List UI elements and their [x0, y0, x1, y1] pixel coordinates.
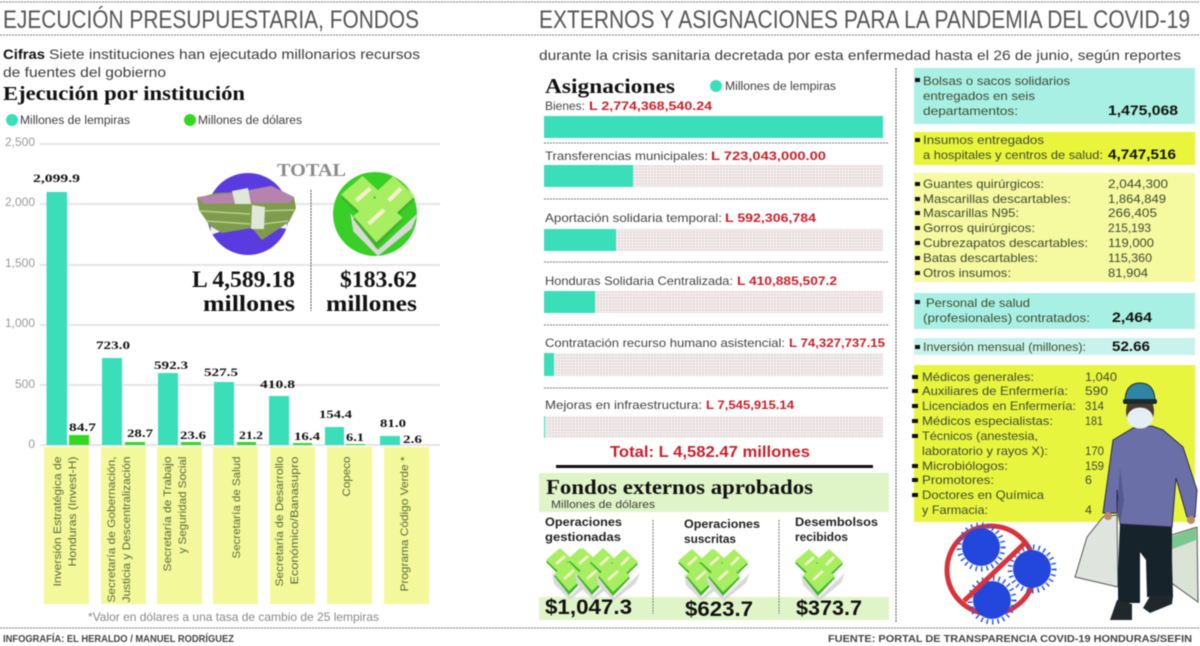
panel: profesionales: Médicos generales:: [922, 370, 1034, 384]
row labels and amounts: Transferencias municipales:: [545, 149, 708, 163]
column: operaciones gestionadas: Operaciones: [545, 517, 622, 529]
column: operaciones suscritas: Operaciones: [684, 519, 760, 531]
total callout: $183.62: [340, 267, 417, 292]
shirt: [1103, 426, 1197, 527]
category labels: Justicia y Descentralización: [121, 456, 133, 602]
panel: lista de insumos: Cubrezapatos descartables:: [923, 236, 1088, 250]
intro text right: durante la crisis sanitaria decretada por esta enfermedad hasta el 26 de junio, según reportes: [539, 47, 1181, 63]
panel: lista de insumos: 119,000: [1108, 236, 1154, 250]
panel: lista de insumos: Otros insumos:: [923, 266, 1011, 280]
category labels: [44, 447, 429, 604]
bar chart: ejecución por institución: 84.7: [69, 420, 96, 434]
row labels and amounts: Aportación solidaria temporal:: [545, 211, 722, 225]
category labels: Copeco: [341, 456, 353, 496]
panel: personal de salud: 2,464: [1112, 309, 1152, 325]
panel: lista de insumos: 81,904: [1108, 266, 1148, 280]
total asignaciones: Total: L 4,582.47 millones: [610, 444, 810, 461]
panel: profesionales: 6: [1085, 473, 1092, 487]
row labels and amounts: L 7,545,915.14: [706, 398, 794, 412]
row labels and amounts: L 410,885,507.2: [737, 274, 837, 288]
bar chart: ejecución por institución: 0: [28, 437, 35, 451]
bar chart: ejecución por institución: 154.4: [319, 407, 352, 421]
panel: profesionales: Auxiliares de Enfermería:: [922, 384, 1068, 398]
intro text left: de fuentes del gobierno: [3, 64, 166, 80]
column: desembolsos recibidos: Desembolsos: [795, 517, 878, 529]
panel: profesionales: laboratorio y rayos X):: [922, 444, 1048, 458]
panel: lista de insumos: 1,864,849: [1108, 192, 1166, 206]
intro text left: [3, 46, 420, 80]
footer: crédito: INFOGRAFÍA: EL HERALDO / MANUEL RODRÍGUEZ: [3, 632, 234, 645]
panel: inversión mensual: 52.66: [1112, 338, 1150, 354]
panel: insumos: 4,747,516: [1108, 146, 1176, 162]
row labels and amounts: Mejoras en infraestructura:: [545, 398, 702, 412]
panel: insumos: a hospitales y centros de salud:: [923, 148, 1103, 162]
heading: fondos externos: Fondos externos aprobados: [546, 475, 813, 499]
panel: profesionales: 181: [1085, 414, 1103, 428]
panel: bolsas: Bolsas o sacos solidarios: [923, 74, 1070, 88]
row labels and amounts: Bienes:: [545, 99, 585, 113]
legend: chart: Millones de lempiras: [20, 115, 130, 127]
panel: lista de insumos: 266,405: [1108, 206, 1157, 220]
panel: profesionales: 159: [1085, 459, 1104, 473]
category labels: Secretaría de Desarrollo: [274, 456, 286, 586]
category labels: Honduras (Invest-H): [67, 456, 79, 566]
column: operaciones gestionadas: [545, 517, 640, 619]
category labels: Secretaría de Salud: [231, 456, 243, 558]
bar chart: ejecución por institución: [5, 135, 440, 451]
category labels: y Seguridad Social: [177, 456, 189, 554]
intro text left: Cifras: [3, 46, 45, 62]
category labels: Secretaría de Gobernación,: [106, 456, 118, 602]
legend: chart: Millones de dólares: [198, 115, 302, 127]
panel: profesionales: 590: [1085, 384, 1108, 398]
panel: profesionales: 4: [1085, 503, 1092, 517]
head and mask: [1126, 394, 1154, 428]
panel: inversión mensual: [914, 338, 1195, 355]
column: operaciones suscritas: suscritas: [684, 534, 736, 546]
bar chart: ejecución por institución: 2,000: [5, 195, 35, 209]
legend: asignaciones: Millones de lempiras: [725, 81, 836, 93]
bar chart: ejecución por institución: 500: [15, 377, 35, 391]
panel: bolsas: entregados en seis: [923, 89, 1035, 103]
row labels and amounts: Contratación recurso humano asistencial:: [545, 336, 785, 350]
bar chart: ejecución por institución: 21.2: [239, 428, 263, 442]
column: desembolsos recibidos: $373.7: [796, 597, 862, 620]
category labels: Inversión Estratégica de: [52, 456, 64, 586]
category labels: Programa Código Verde *: [399, 456, 411, 592]
bar chart: ejecución por institución: 592.3: [154, 358, 188, 372]
row labels and amounts: L 74,327,737.15: [789, 336, 885, 350]
heading: ejecución por institución: Ejecución por institución: [3, 83, 245, 105]
icon: lempiras: [197, 173, 296, 255]
panel: lista de insumos: Mascarillas N95:: [923, 206, 1019, 220]
bar chart: ejecución por institución: 28.7: [127, 426, 153, 440]
panel: lista de insumos: Mascarillas descartables:: [923, 192, 1071, 206]
total callout: millones: [326, 291, 417, 316]
panel: profesionales: [912, 365, 1195, 522]
bar chart: ejecución por institución: 16.4: [294, 429, 320, 443]
panel: lista de insumos: [914, 173, 1195, 282]
panel: profesionales: Técnicos (anestesia,: [922, 429, 1038, 443]
panel: bolsas: [914, 68, 1195, 124]
icon: dólares: [333, 172, 418, 256]
bar chart: ejecución por institución: 23.6: [180, 428, 206, 442]
panel: personal de salud: [914, 293, 1195, 329]
bar chart: ejecución por institución: 81.0: [380, 416, 406, 430]
column: operaciones suscritas: $623.7: [685, 598, 753, 621]
trousers and shoes: [1118, 522, 1173, 603]
icon: virus prohibido: [947, 525, 1054, 622]
panel: lista de insumos: 2,044,300: [1108, 177, 1168, 191]
bar chart: ejecución por institución: 1,500: [5, 256, 35, 270]
category labels: Económico/Banasupro: [289, 456, 301, 584]
panel: lista de insumos: 215,193: [1108, 221, 1151, 235]
panel: asignaciones: [544, 74, 888, 461]
panel: fondos externos aprobados: Millones de dólares: [551, 499, 656, 511]
panel: insumos: Insumos entregados: [923, 133, 1044, 147]
column: desembolsos recibidos: recibidos: [795, 532, 848, 544]
bar chart: ejecución por institución: 723.0: [96, 338, 130, 352]
bar chart: ejecución por institución: 6.1: [346, 430, 364, 444]
panel: insumos: [914, 132, 1195, 165]
panel: personal de salud: Personal de salud: [926, 296, 1030, 310]
panel: profesionales: Promotores:: [922, 473, 994, 487]
total callout: TOTAL: [277, 160, 346, 180]
panel: bolsas: 1,475,068: [1108, 102, 1178, 118]
left bag: [1075, 515, 1118, 587]
total callout: L 4,589.18: [192, 267, 295, 292]
footer: fuente: FUENTE: PORTAL DE TRANSPARENCIA COVID-19 HONDURAS/SEFIN: [828, 634, 1192, 645]
panel: personal de salud: (profesionales) contratados:: [923, 311, 1090, 325]
footnote: *Valor en dólares a una tasa de cambio de 25 lempiras: [88, 610, 379, 624]
panel: profesionales: 314: [1085, 399, 1104, 413]
bar chart: ejecución por institución: 2,500: [5, 135, 35, 149]
heading: asignaciones: Asignaciones: [545, 74, 675, 98]
total callout: [192, 160, 418, 316]
row labels and amounts: [545, 99, 885, 412]
icon: hombre con bolsas: [1075, 383, 1198, 620]
panel: profesionales: Médicos especialistas:: [922, 414, 1053, 428]
category labels: Secretaría de Trabajo: [162, 456, 174, 572]
bar chart: ejecución por institución: 1,000: [5, 316, 35, 330]
panel: profesionales: Microbiólogos:: [922, 459, 1008, 473]
column: desembolsos recibidos: [795, 517, 878, 620]
row labels and amounts: L 592,306,784: [725, 211, 816, 225]
panel: lista de insumos: Batas descartables:: [923, 251, 1038, 265]
cap: [1125, 383, 1155, 402]
panel: lista de insumos: Gorros quirúrgicos:: [923, 221, 1035, 235]
row labels and amounts: Honduras Solidaria Centralizada:: [545, 274, 733, 288]
right bag: [1163, 527, 1198, 602]
panel: profesionales: Doctores en Química: [922, 488, 1044, 502]
intro text left: Siete instituciones han ejecutado millonarios recursos: [49, 46, 420, 62]
bar chart: ejecución por institución: 2.6: [403, 432, 422, 446]
panel: profesionales: y Farmacia:: [922, 503, 988, 517]
row labels and amounts: L 723,043,000.00: [711, 149, 826, 163]
title left: EJECUCIÓN PRESUPUESTARIA, FONDOS: [3, 5, 419, 34]
total callout: millones: [203, 291, 295, 316]
bar chart: ejecución por institución: 527.5: [204, 365, 238, 379]
bar chart: ejecución por institución: 2,099.9: [33, 171, 80, 185]
panel: bolsas: departamentos:: [923, 104, 1018, 118]
panel: lista de insumos: 115,360: [1108, 251, 1152, 265]
panel: profesionales: 1,040: [1085, 370, 1117, 384]
panel: fondos externos aprobados: [539, 473, 889, 621]
column: operaciones gestionadas: gestionadas: [545, 532, 621, 544]
header rules: [0, 2, 1200, 35]
panel: profesionales: Licenciados en Enfermería:: [922, 399, 1076, 413]
bar chart: ejecución por institución: 410.8: [260, 377, 295, 391]
row labels and amounts: L 2,774,368,540.24: [589, 99, 712, 113]
panel: lista de insumos: Guantes quirúrgicos:: [923, 177, 1044, 191]
legend: chart: [6, 114, 302, 127]
column: operaciones gestionadas: $1,047.3: [545, 596, 632, 619]
column: operaciones suscritas: [678, 519, 760, 621]
panel: inversión mensual: Inversión mensual (millones):: [923, 340, 1086, 354]
panel: profesionales: 170: [1085, 444, 1104, 458]
horizontal bars: [544, 116, 883, 438]
